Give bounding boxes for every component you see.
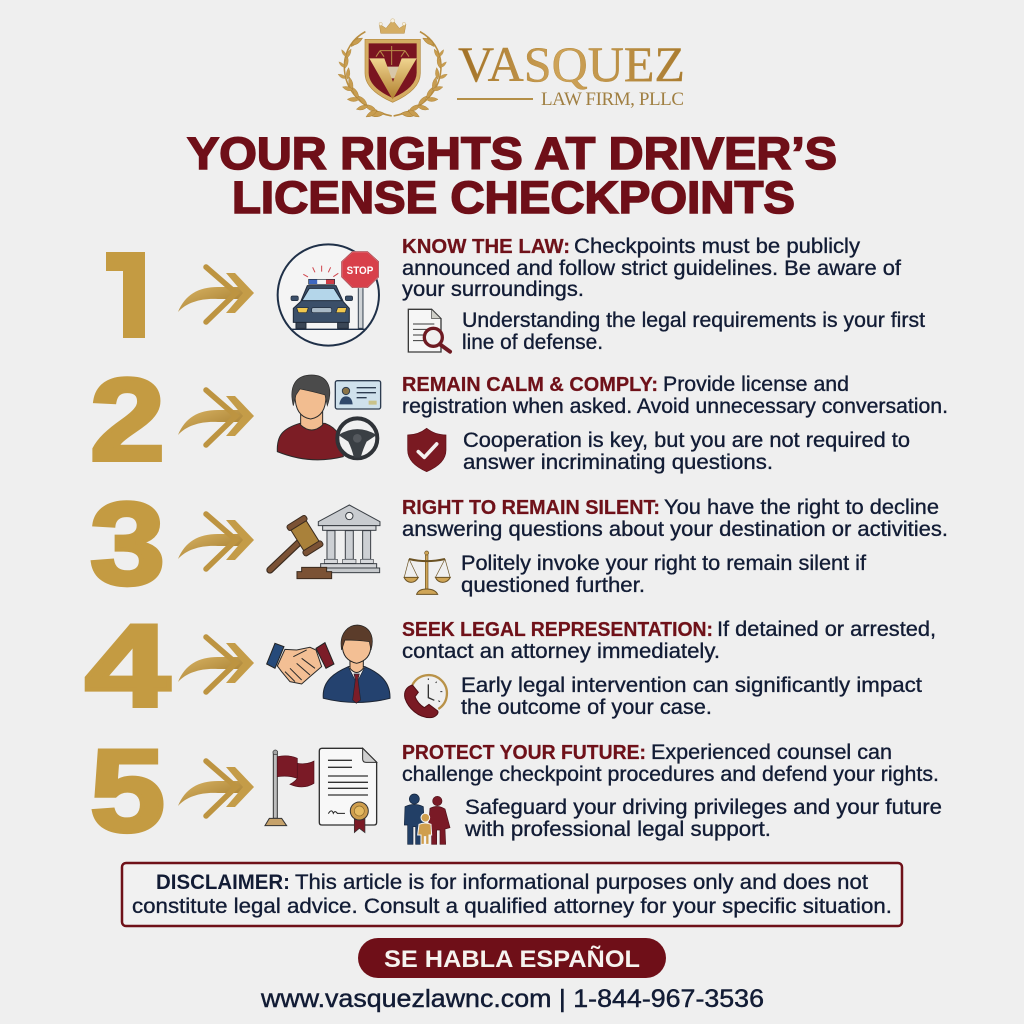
text: know the law: announced and follow strict guidelines. Be aware of — [402, 257, 901, 280]
disclaimer box: constitute legal advice. Consult a qualified attorney for your specific situation. — [132, 895, 892, 918]
title: YOUR RIGHTS AT DRIVER’S — [187, 128, 837, 179]
logo name: VASQUEZ — [458, 36, 685, 92]
text: right to remain silent: You have the right to decline — [664, 496, 939, 519]
title: LICENSE CHECKPOINTS — [232, 172, 795, 223]
text: seek legal representation: If detained or arrested, — [717, 618, 936, 641]
subtext: remain calm: Cooperation is key, but you are not required to — [463, 429, 910, 452]
disclaimer box: This article is for informational purposes only and does not — [295, 871, 868, 894]
text: remain calm: REMAIN CALM & COMPLY: — [402, 373, 658, 396]
icon: document with magnifier — [408, 309, 450, 352]
arrow 3 — [178, 514, 254, 569]
icon: police car at stop sign: STOP — [347, 265, 374, 277]
text: protect your future: challenge checkpoint procedures and defend your rights. — [402, 763, 939, 786]
text: remain calm — [402, 373, 948, 418]
text: know the law: KNOW THE LAW: — [402, 235, 570, 258]
arrow 1 — [178, 267, 254, 322]
icon: shield with check — [408, 428, 446, 472]
row 4: seek legal representation — [85, 600, 936, 731]
text: right to remain silent: answering questions about your destination or activities. — [402, 518, 948, 541]
logo — [337, 19, 685, 119]
disclaimer box: DISCLAIMER: — [156, 871, 290, 894]
subtext: know the law: line of defense. — [462, 331, 603, 354]
subtext: seek legal representation: Early legal intervention can significantly impact — [461, 674, 922, 697]
number 2: 2 — [90, 354, 165, 485]
text: right to remain silent — [402, 496, 948, 541]
text: protect your future: PROTECT YOUR FUTURE: — [402, 741, 646, 764]
logo tagline: LAW FIRM, PLLC — [541, 89, 684, 110]
disclaimer box — [122, 863, 902, 926]
icon: scales of justice — [404, 551, 450, 594]
subtext: know the law — [462, 309, 925, 354]
row 3: right to remain silent — [90, 478, 948, 609]
icon: police car at stop sign — [278, 244, 379, 346]
arrow 2 — [178, 390, 254, 445]
icon: driver with license and steering wheel — [277, 375, 381, 460]
subtext: protect your future: with professional legal support. — [464, 818, 771, 841]
text: remain calm: Provide license and — [663, 373, 849, 396]
text: protect your future: Experienced counsel can — [651, 741, 892, 764]
contact line: www.vasquezlawnc.com | 1-844-967-3536 — [260, 985, 764, 1013]
title — [187, 128, 837, 223]
text: know the law: Checkpoints must be publicly — [574, 235, 861, 258]
icon: family — [404, 794, 450, 844]
text: seek legal representation: contact an attorney immediately. — [402, 640, 720, 663]
row 5: protect your future — [90, 725, 942, 856]
icon: handshake and attorney — [267, 625, 390, 703]
icon: flag and signed certificate — [265, 748, 377, 833]
subtext: remain calm: answer incriminating questions. — [463, 451, 773, 474]
subtext: protect your future — [464, 796, 942, 841]
logo emblem: shield, laurels and crown — [337, 19, 448, 119]
number 4: 4 — [85, 600, 170, 731]
text: seek legal representation — [402, 618, 936, 663]
subtext: protect your future: Safeguard your driving privileges and your future — [465, 796, 942, 819]
number 1 — [106, 252, 145, 338]
number 5: 5 — [90, 725, 165, 856]
row 2: remain calm — [90, 354, 948, 485]
row 1: know the law — [106, 237, 926, 354]
text: right to remain silent: RIGHT TO REMAIN SILENT: — [402, 496, 660, 519]
icon: clock and phone — [405, 675, 447, 718]
subtext: remain calm — [463, 429, 910, 474]
text: know the law: your surroundings. — [402, 278, 584, 301]
text: remain calm: registration when asked. Avoid unnecessary conversation. — [402, 395, 948, 418]
text: protect your future — [402, 741, 939, 786]
subtext: seek legal representation — [461, 674, 922, 719]
text: seek legal representation: SEEK LEGAL REPRESENTATION: — [402, 618, 713, 641]
icon: gavel and courthouse — [270, 505, 380, 579]
language badge: SE HABLA ESPAÑOL — [384, 945, 640, 973]
number 1: 1 — [85, 232, 161, 363]
subtext: right to remain silent: Politely invoke your right to remain silent if — [461, 552, 866, 575]
arrow 5 — [178, 761, 254, 816]
subtext: right to remain silent: questioned further. — [461, 574, 645, 597]
language badge — [358, 938, 666, 978]
number 3: 3 — [90, 478, 165, 609]
subtext: right to remain silent — [461, 552, 866, 597]
subtext: seek legal representation: the outcome of your case. — [461, 696, 712, 719]
text: know the law — [402, 235, 901, 301]
arrow 4 — [178, 637, 254, 692]
subtext: know the law: Understanding the legal requirements is your first — [462, 309, 925, 332]
